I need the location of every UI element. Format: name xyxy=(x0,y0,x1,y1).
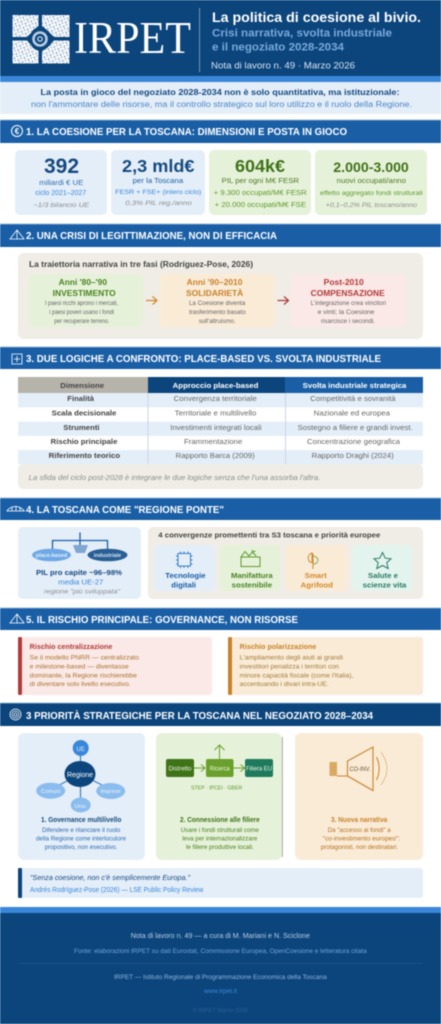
diagram: multilevel governance: Comuni xyxy=(41,789,60,795)
icon: warning triangle xyxy=(10,614,24,623)
card: governance multilivello xyxy=(18,733,145,860)
phase: compensazione: e vinti; la Coesione xyxy=(318,309,375,316)
card: connessione alle filiere: leva per internazionalizzare xyxy=(182,836,258,842)
card: 2,3 mld€ xyxy=(111,150,205,215)
tile: tecnologie digitali: digitali xyxy=(171,580,196,590)
diagram: value chain: STEP · IPCEI · GBER xyxy=(191,786,242,792)
table rows: Investimenti integrati locali xyxy=(170,423,262,432)
phase: investimento: I paesi ricchi aprono i mercati, xyxy=(45,300,118,307)
card: 2.000-3.000: 2.000-3.000 xyxy=(333,160,409,175)
card: 2,3 mld€: 0,3% PIL reg./anno xyxy=(125,200,192,207)
card: 604k€: + 9.300 occupati/M€ FESR xyxy=(214,190,307,197)
panel: key figures xyxy=(15,150,427,215)
phase: investimento xyxy=(29,274,143,327)
card: rischio polarizzazione xyxy=(228,637,423,695)
header band xyxy=(0,0,441,82)
IRPET logo xyxy=(12,13,191,64)
card: 604k€: + 20.000 occupati/M€ FSE xyxy=(215,202,306,209)
card: governance multilivello: Difendere e rilanciare il ruolo xyxy=(42,827,121,834)
table note: La sfida del ciclo post-2028 è integrare le due logiche senza che l'una assorba l'altra. xyxy=(29,475,320,482)
card: rischio centralizzazione: di diventare solo livello esecutivo. xyxy=(30,681,131,688)
diagram: multilevel governance xyxy=(36,740,125,812)
phase: investimento: INVESTIMENTO xyxy=(53,289,116,298)
section 6 heading: 3 PRIORITÀ STRATEGICHE PER LA TOSCANA NEL NEGOZIATO 2028–2034 xyxy=(26,709,373,722)
card: 392: ~1/3 bilancio UE xyxy=(33,202,90,209)
card: nuova narrativa: 3. Nuova narrativa xyxy=(331,817,387,824)
card: 2.000-3.000: effetto aggregato fondi strutturali xyxy=(320,190,423,197)
header subtitle xyxy=(212,28,392,54)
tile: smart agrifood xyxy=(286,545,347,591)
section 2 heading xyxy=(0,224,441,247)
card: 2.000-3.000 xyxy=(315,150,427,215)
table header xyxy=(18,377,423,393)
phase: solidarietà: Anni '90–2010 xyxy=(187,278,243,287)
diagram: value chain: Ricerca xyxy=(210,766,230,772)
table rows: Sostegno a filiere e grandi invest. xyxy=(298,423,413,432)
card: rischio centralizzazione: Rischio centralizzazione xyxy=(30,644,112,651)
icon: warning triangle xyxy=(10,230,24,239)
footer: Nota di lavoro n. 49 — a cura di M. Mariani e N. Sciclone xyxy=(131,931,310,940)
header subtitle: e il negoziato 2028-2034 xyxy=(212,42,345,54)
card: governance multilivello: propositivo, non esecutivo. xyxy=(45,844,118,851)
icon: euro: € xyxy=(15,127,20,136)
card: governance multilivello: 1. Governance multilivello xyxy=(41,817,121,824)
table rows: Competitività e sovranità xyxy=(310,394,396,403)
card: 392: 392 xyxy=(44,155,79,178)
icon: chip xyxy=(176,552,192,568)
panel: four convergences xyxy=(148,527,423,599)
table rows: Frammentazione xyxy=(184,437,242,446)
footer: Fonte: elaborazioni IRPET su dati Eurostat, Commissione Europea, OpenCoesione e letteratura citata xyxy=(74,948,367,955)
footer xyxy=(0,907,441,1024)
phase: compensazione: risarcisce i secondi. xyxy=(321,318,375,325)
diagram: multilevel governance: Regione xyxy=(67,772,93,779)
panel: four convergences: 4 convergenze promettenti tra S3 toscana e priorità europee xyxy=(158,530,380,540)
icon: euro xyxy=(12,126,22,136)
phase: compensazione: Post-2010 xyxy=(324,278,364,287)
phase: solidarietà: SOLIDARIETÀ xyxy=(186,289,244,298)
panel: Tuscany bridge region xyxy=(18,527,141,599)
table rows: Concentrazione geografica xyxy=(307,437,400,446)
phase: investimento: Anni '80–'90 xyxy=(59,278,108,287)
card: rischio centralizzazione: Se il modello PNRR — centralizzato xyxy=(30,654,139,662)
card: 2.000-3.000: +0,1–0,2% PIL toscano/anno xyxy=(326,202,417,209)
arrow: phase 1 to 2 xyxy=(146,296,157,304)
icon: balance: place-based xyxy=(36,553,67,559)
table rows: Strumenti xyxy=(63,423,100,432)
panel: narrative trajectory: La traiettoria narrativa in tre fasi (Rodríguez-Pose, 2026) xyxy=(29,260,253,269)
tile: tecnologie digitali xyxy=(154,545,215,591)
tile: salute e scienze vita: scienze vita xyxy=(363,580,407,590)
card: 392 xyxy=(15,150,107,215)
card: nuova narrativa: "co-investimento europeo": xyxy=(323,836,400,842)
card: nuova narrativa: protagonisti, non destinatari. xyxy=(321,844,398,851)
table rows: Finalità xyxy=(67,394,95,403)
icon: target xyxy=(10,709,21,720)
card: nuova narrativa: Da "accesso ai fondi" a xyxy=(328,827,391,834)
card: rischio centralizzazione xyxy=(18,637,212,695)
phase: solidarietà xyxy=(160,274,275,327)
diagram: multilevel governance: Imprese xyxy=(101,789,121,795)
card: 392: ciclo 2021–2027 xyxy=(35,188,86,197)
diagram: value chain xyxy=(166,745,273,792)
tile: salute e scienze vita: Salute e xyxy=(368,571,398,580)
card: 604k€: PIL per ogni M€ FESR xyxy=(222,178,299,185)
card: 604k€: 604k€ xyxy=(235,156,285,176)
header title: La politica di coesione al bivio. xyxy=(212,10,421,25)
panel: Tuscany bridge region: media UE-27 xyxy=(58,578,103,586)
card: rischio polarizzazione: investitori penalizza i territori con xyxy=(240,664,339,670)
card: nuova narrativa xyxy=(295,733,423,860)
IRPET logo: IRPET xyxy=(74,13,191,63)
table rows: Rapporto Barca (2009) xyxy=(176,451,255,460)
quote callout: "Senza coesione, non c'è semplicemente Europa." xyxy=(30,873,190,882)
table rows xyxy=(49,394,413,460)
icon: sprout xyxy=(308,553,318,569)
card: connessione alle filiere: Usare i fondi strutturali come xyxy=(181,827,259,834)
icon: balance xyxy=(32,532,128,561)
card: rischio polarizzazione: Rischio polarizzazione xyxy=(240,644,316,651)
quote callout: Andrés Rodríguez-Pose (2026) — LSE Public Policy Review xyxy=(30,887,204,894)
card: rischio polarizzazione: L'ampliamento degli aiuti ai grandi xyxy=(240,654,343,662)
icon: comparison box xyxy=(12,354,22,364)
phase: compensazione: L'integrazione crea vincitori xyxy=(311,300,386,307)
section 4 heading xyxy=(0,498,441,520)
phase: solidarietà: trasferimento basato xyxy=(189,309,246,316)
publication note: Nota di lavoro n. 49 · Marzo 2026 xyxy=(211,60,355,72)
card: 2,3 mld€: FESR + FSE+ (intero ciclo) xyxy=(115,189,201,196)
key message banner: non l'ammontare delle risorse, ma il controllo strategico sul loro utilizzo e il ruolo della Regione. xyxy=(31,100,412,109)
section 2 heading: 2. UNA CRISI DI LEGITTIMAZIONE, NON DI EFFICACIA xyxy=(26,230,277,242)
tile: smart agrifood: Smart xyxy=(305,571,327,580)
diagram: multilevel governance: Univ. xyxy=(75,804,87,810)
footer: IRPET — Istituto Regionale di Programmazione Economica della Toscana xyxy=(114,974,327,981)
diagram: value chain: Distretto xyxy=(168,766,192,772)
footer: www.irpet.it xyxy=(203,988,237,995)
table rows: Rapporto Draghi (2024) xyxy=(312,451,394,460)
phase: solidarietà: La Coesione diventa xyxy=(189,300,246,307)
phase: solidarietà: sull'altruismo. xyxy=(199,318,236,325)
section 5 heading: 5. IL RISCHIO PRINCIPALE: GOVERNANCE, NON RISORSE xyxy=(26,614,298,626)
table rows: Convergenza territoriale xyxy=(174,394,257,403)
table header: Svolta industriale strategica xyxy=(303,381,407,390)
phase: compensazione: COMPENSAZIONE xyxy=(311,289,385,298)
card: 2,3 mld€: per la Toscana xyxy=(133,176,183,185)
icon: star xyxy=(374,552,391,568)
quote callout xyxy=(18,868,423,898)
icon: factory and hills xyxy=(241,550,260,566)
card: connessione alle filiere: le filiere produttive locali. xyxy=(186,844,254,851)
icon: bridge xyxy=(7,506,25,511)
header subtitle: Crisi narrativa, svolta industriale xyxy=(212,28,392,40)
tile: tecnologie digitali: Tecnologie xyxy=(165,571,206,580)
icon: balance: industriale xyxy=(94,553,121,559)
table rows: Scala decisionale xyxy=(52,408,116,418)
section 6 heading xyxy=(0,702,441,726)
phase: investimento: i paesi poveri usano i fondi xyxy=(49,309,114,316)
table rows: Riferimento teorico xyxy=(49,451,121,460)
card: 2,3 mld€: 2,3 mld€ xyxy=(122,156,195,176)
footer: © IRPET Marzo 2026 xyxy=(193,1007,248,1014)
section 5 heading xyxy=(0,608,441,630)
card: rischio polarizzazione: minore capacità fiscale (come l'Italia), xyxy=(240,672,354,680)
section 1 heading xyxy=(0,120,441,143)
key message banner: La posta in gioco del negoziato 2028-2034 non è solo quantitativa, ma istituzionale: xyxy=(40,88,400,97)
phase: compensazione xyxy=(291,274,406,327)
card: connessione alle filiere xyxy=(156,733,283,860)
section 4 heading: 4. LA TOSCANA COME "REGIONE PONTE" xyxy=(26,504,224,516)
tile: manifattura sostenibile: Manifattura xyxy=(231,571,274,580)
table header: Approccio place-based xyxy=(173,381,258,390)
card: rischio centralizzazione: e milestone-based — diventasse xyxy=(30,664,129,670)
diagram: multilevel governance: UE xyxy=(77,747,85,753)
tile: salute e scienze vita xyxy=(352,545,412,591)
tile: manifattura sostenibile: sostenibile xyxy=(232,580,272,590)
tile: smart agrifood: Agrifood xyxy=(301,580,333,590)
icon: megaphone: CO-INV. xyxy=(350,767,371,773)
comparison table xyxy=(18,377,423,489)
arrow: phase 2 to 3 xyxy=(278,296,288,304)
card: rischio polarizzazione: accentuando i divari intra-UE. xyxy=(240,681,329,688)
table rows: Rischio principale xyxy=(51,437,117,446)
section 3 heading: 3. DUE LOGICHE A CONFRONTO: PLACE-BASED VS. SVOLTA INDUSTRIALE xyxy=(26,353,381,365)
card: 604k€ xyxy=(209,150,311,215)
table rows: Territoriale e multilivello xyxy=(175,408,256,418)
card: rischio centralizzazione: dominante, la Regione rischierebbe xyxy=(30,672,137,680)
card: 2.000-3.000: nuovi occupati/anno xyxy=(337,178,406,185)
table header: Dimensione xyxy=(60,381,104,390)
section 1 heading: 1. LA COESIONE PER LA TOSCANA: DIMENSIONI E POSTA IN GIOCO xyxy=(26,126,347,138)
panel: Tuscany bridge region: regione "più sviluppata" xyxy=(44,588,121,596)
card: governance multilivello: della Regione come interlocutore xyxy=(36,836,126,842)
table rows: Nazionale ed europea xyxy=(314,408,390,418)
tile: manifattura sostenibile xyxy=(220,545,280,591)
card: 392: miliardi € UE xyxy=(39,178,84,187)
panel: narrative trajectory xyxy=(18,253,423,339)
panel: Tuscany bridge region: PIL pro capite ~96–98% xyxy=(36,568,123,577)
section 3 heading xyxy=(0,346,441,369)
phase: investimento: per recuperare terreno. xyxy=(54,318,110,325)
diagram: value chain: Filiera EU xyxy=(246,766,272,772)
card: connessione alle filiere: 2. Connessione alle filiere xyxy=(180,817,260,824)
key message banner xyxy=(0,82,441,114)
